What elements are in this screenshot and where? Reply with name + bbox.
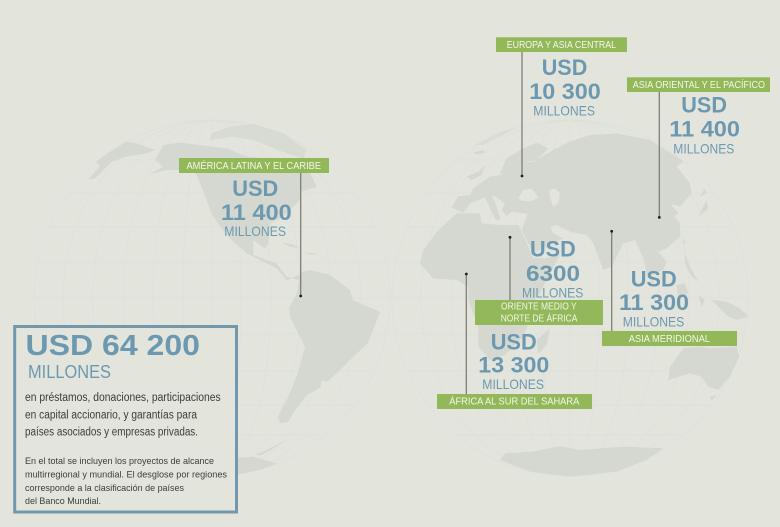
- amount: MILLONES: [482, 376, 544, 392]
- description: en capital accionario, y garantías para: [25, 409, 198, 421]
- land: Scandinavia: [500, 143, 548, 175]
- callout: Asia meridional: [602, 230, 737, 346]
- footnote: multirregional y mundial. El desglose por regiones: [25, 470, 227, 481]
- amount: USD: [491, 329, 537, 354]
- right globe: Eurasia and Africa: [420, 129, 748, 476]
- amount: [478, 329, 549, 392]
- left globe graticule: [30, 120, 394, 476]
- footnote: En el total se incluyen los proyectos de alcance: [25, 456, 214, 467]
- footnote: del Banco Mundial.: [25, 496, 101, 507]
- land: Japan and Sakhalin: [698, 200, 708, 217]
- amount: USD: [681, 93, 727, 118]
- amount: MILLONES: [673, 140, 734, 156]
- description: en préstamos, donaciones, participaciones: [25, 392, 221, 404]
- amount: [529, 55, 601, 119]
- land: Australia: [668, 347, 739, 390]
- amount: 11 300: [619, 290, 689, 315]
- amount: MILLONES: [224, 223, 286, 239]
- land: Antarctica, left: [230, 440, 287, 476]
- leader line: [521, 52, 523, 177]
- label bar: ASIA MERIDIONAL: [629, 334, 710, 345]
- label bar: EUROPA Y ASIA CENTRAL: [507, 40, 616, 51]
- leader line: [509, 236, 511, 300]
- panel: total summary: [15, 326, 237, 512]
- amount: MILLONES: [522, 284, 583, 300]
- callout: África al sur del Sahara: [437, 273, 592, 409]
- land: Indonesia and Philippines: [677, 283, 688, 300]
- label bar: [475, 300, 603, 325]
- callout: América Latina y el Caribe: [179, 158, 329, 297]
- amount: USD: [530, 237, 576, 262]
- amount: [522, 237, 583, 300]
- label bar: [627, 77, 770, 92]
- amount: 11 400: [221, 200, 292, 225]
- land: British Isles, Iceland: [467, 165, 485, 180]
- label bar: AMÉRICA LATINA Y EL CARIBE: [186, 159, 321, 172]
- description: [25, 392, 221, 439]
- amount: [619, 267, 689, 330]
- amount: [669, 93, 740, 156]
- land: North America: [88, 124, 317, 281]
- amount: USD: [631, 267, 677, 292]
- amount: 6300: [526, 261, 580, 286]
- amount: MILLONES: [533, 103, 595, 119]
- land: Madagascar: [537, 328, 550, 353]
- callout: Europa y Asia Central: [496, 37, 627, 177]
- seas: Black Sea and Caspian: [518, 188, 538, 202]
- footnote: [25, 456, 227, 507]
- total amount: USD 64 200: [26, 330, 200, 362]
- leader line: [658, 92, 661, 219]
- land: Greenland: [475, 127, 517, 145]
- label bar: [437, 394, 592, 409]
- amount: MILLONES: [623, 314, 684, 330]
- right globe graticule: [388, 120, 752, 476]
- label bar: ÁFRICA AL SUR DEL SAHARA: [449, 395, 580, 408]
- callout: Oriente Medio y Norte de África: [475, 236, 603, 325]
- leader line: [299, 173, 302, 297]
- label bar: ORIENTE MEDIO Y: [501, 301, 577, 312]
- land: Eurasia, Africa and Oceania: [420, 127, 748, 477]
- leader line: [610, 230, 613, 331]
- land: Africa: [420, 213, 560, 360]
- land: Antarctica: [500, 446, 663, 477]
- land: Tasmania: [710, 395, 717, 401]
- land: New Guinea: [712, 300, 748, 320]
- total unit: MILLONES: [28, 362, 111, 382]
- panel frame: [15, 326, 237, 512]
- amount: 11 400: [669, 117, 740, 142]
- amount: USD: [542, 55, 587, 80]
- amount: USD: [232, 176, 278, 201]
- land: South America: [278, 270, 380, 423]
- footnote: corresponde a la clasificación de países: [25, 483, 184, 494]
- label bar: [496, 37, 627, 52]
- label bar: NORTE DE ÁFRICA: [501, 311, 578, 324]
- amount: 10 300: [529, 79, 601, 104]
- description: países asociados y empresas privadas.: [25, 427, 198, 439]
- land: Eurasia: [452, 133, 692, 287]
- label bar: [179, 158, 329, 173]
- label bar: ASIA ORIENTAL Y EL PACÍFICO: [633, 78, 765, 91]
- amount: [221, 176, 292, 239]
- left globe: Americas: [88, 124, 380, 474]
- callout: Asia oriental y el Pacífico: [627, 77, 770, 219]
- leader line: [465, 273, 468, 394]
- amount: 13 300: [478, 353, 549, 378]
